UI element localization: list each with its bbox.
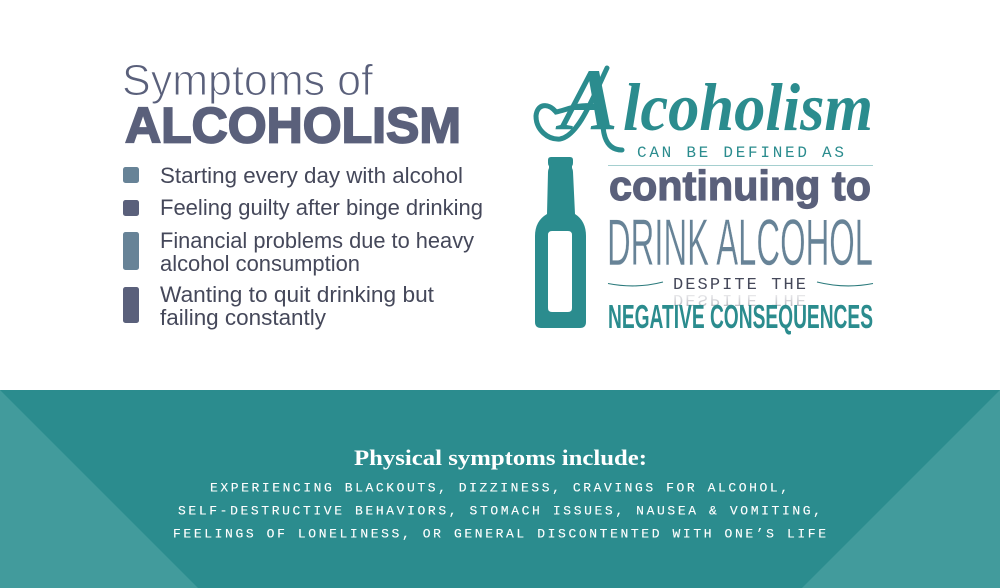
list item: wanting to quit: failing constantly xyxy=(160,305,326,330)
text: continuing to: continuing to xyxy=(609,162,871,209)
title: Symptoms of Alcoholism xyxy=(122,56,461,154)
text: symptoms list xyxy=(173,480,826,542)
text: symptoms list: EXPERIENCING BLACKOUTS, DIZZINESS, CRAVINGS FOR ALCOHOL, xyxy=(210,480,788,496)
list item: wanting to quit: Wanting to quit drinking but xyxy=(160,282,434,307)
text: can be defined as: CAN BE DEFINED AS xyxy=(637,144,844,162)
symptom list xyxy=(123,163,483,330)
heading: Alcoholism script xyxy=(536,52,873,150)
definition lettering xyxy=(536,52,873,335)
list item: starting every day: Starting every day with alcohol xyxy=(160,163,463,188)
heading: Alcoholism script: A xyxy=(555,52,618,149)
list item: financial problems: alcohol consumption xyxy=(160,251,360,276)
title: Symptoms of Alcoholism: Symptoms of xyxy=(122,56,374,105)
heading: physical symptoms include: Physical symptoms include: xyxy=(354,445,647,470)
title: Symptoms of Alcoholism: ALCOHOLISM xyxy=(125,98,461,154)
list item: wanting to quit xyxy=(123,282,434,330)
list item: financial problems: Financial problems due to heavy xyxy=(160,228,474,253)
list item: financial problems xyxy=(123,228,474,276)
text: despite the xyxy=(608,276,873,308)
text: symptoms list: SELF-DESTRUCTIVE BEHAVIORS, STOMACH ISSUES, NAUSEA & VOMITING, xyxy=(178,504,821,518)
text: symptoms list: FEELINGS OF LONELINESS, OR GENERAL DISCONTENTED WITH ONE’S LIFE xyxy=(173,526,826,542)
heading: Alcoholism script: lcoholism xyxy=(623,69,873,145)
text: despite the: DESPITE THE xyxy=(673,276,806,295)
text: despite the: DESPITE THE xyxy=(673,289,806,308)
icon: bottle xyxy=(535,157,586,328)
list item: feeling guilty: Feeling guilty after binge drinking xyxy=(160,195,483,220)
panel: physical symptoms xyxy=(0,390,1000,588)
